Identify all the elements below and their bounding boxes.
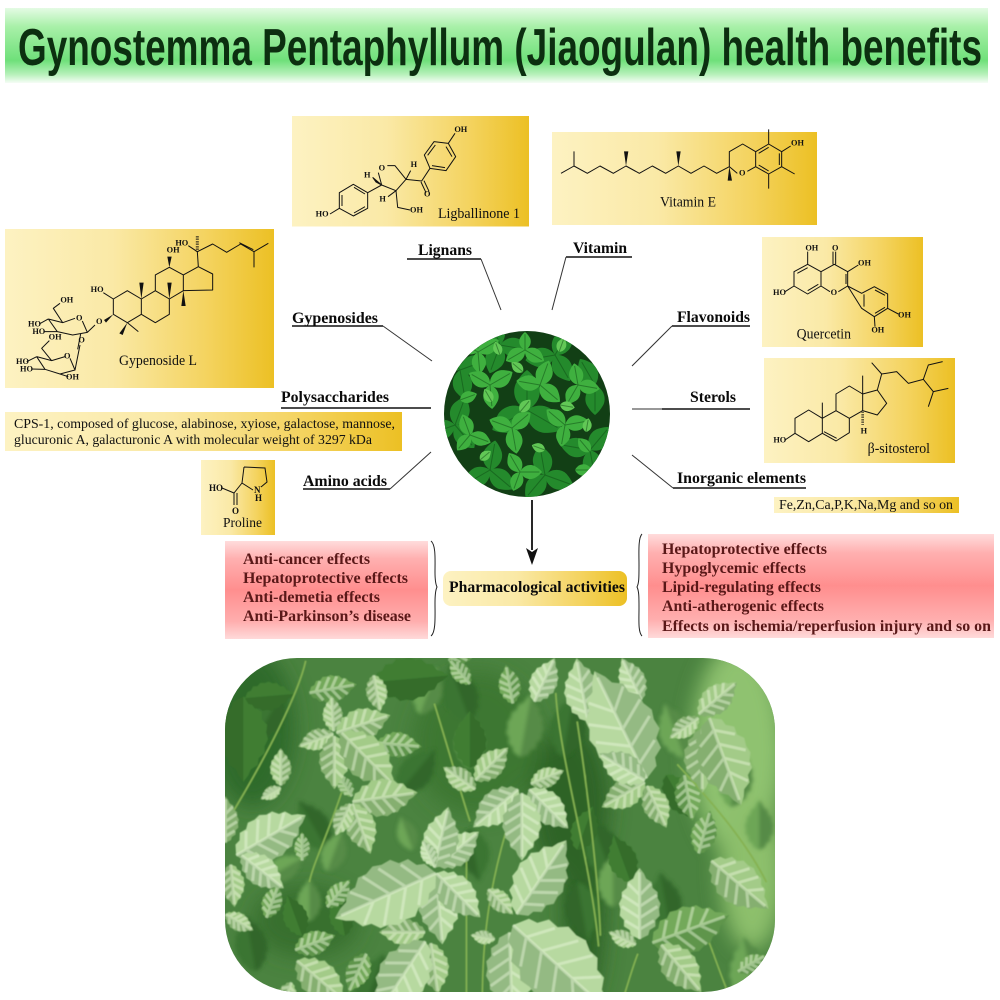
connector: Lignans: Lignans (418, 242, 472, 259)
stems (227, 661, 766, 1000)
panel: Vitamin E structure (552, 129, 817, 225)
connector: Gypenosides (292, 310, 432, 361)
panel: Quercetin structure: HO (773, 288, 786, 297)
panel: Gypenoside L structure (5, 229, 274, 388)
panel: Gypenoside L structure: OH (66, 373, 79, 382)
panel: pharmacological activities: Pharmacological activities (449, 579, 625, 596)
panel: Ligballinone 1 structure: H (411, 160, 418, 169)
panel: Gypenoside L structure: HO (32, 327, 46, 336)
panel: right effects list (648, 534, 994, 638)
panel: Gypenoside L structure: HO (175, 239, 189, 248)
panel: polysaccharide description: CPS-1, composed of glucose, alabinose, xyiose, galactose, mannose, (14, 416, 395, 431)
right brace (637, 534, 642, 636)
connector: Sterols: Sterols (690, 389, 736, 406)
panel: Gypenoside L structure: OH (60, 295, 74, 304)
panel: Proline structure: Proline (223, 516, 262, 531)
panel: Quercetin structure: O (831, 288, 838, 297)
panel: right effects list: Hypoglycemic effects (662, 560, 806, 577)
connector: Polysaccharides: Polysaccharides (281, 389, 389, 406)
blurred colour wash (225, 658, 775, 988)
light front leaves (224, 652, 678, 1000)
panel: Gypenoside L structure: HO (16, 357, 29, 366)
panel: Gypenoside L structure: O (64, 351, 71, 360)
panel: beta-sitosterol structure (764, 358, 955, 463)
panel: Ligballinone 1 structure: H (379, 195, 386, 204)
panel: Ligballinone 1 structure: H (364, 170, 371, 179)
panel: Gypenoside L structure: O (78, 335, 85, 344)
panel: Ligballinone 1 structure: HO (316, 210, 329, 219)
panel: Ligballinone 1 structure: OH (454, 125, 468, 134)
dark and mid foliage (242, 658, 688, 936)
panel: Gypenoside L structure: O (96, 317, 103, 326)
panel: polysaccharide description (5, 412, 402, 451)
central leaf photo (444, 331, 610, 497)
panel: Gypenoside L structure: O (76, 314, 83, 323)
panel: Ligballinone 1 structure: O (424, 190, 431, 199)
panel: Vitamin E structure: OH (791, 138, 804, 147)
connector: Amino acids: Amino acids (303, 473, 387, 490)
panel: Quercetin structure: OH (805, 244, 819, 253)
panel: Ligballinone 1 structure (292, 116, 529, 226)
panel: Quercetin structure: OH (871, 325, 885, 334)
panel: Quercetin structure: O (832, 244, 839, 253)
panel: pharmacological activities (443, 571, 627, 606)
panel: beta-sitosterol structure: β-sitosterol (868, 441, 930, 457)
arrow to pharmacological activities (526, 500, 538, 565)
panel: Proline structure (201, 460, 275, 535)
panel: Gypenoside L structure: HO (28, 320, 41, 329)
connector: Flavonoids: Flavonoids (677, 309, 750, 326)
connector: Sterols (632, 389, 750, 409)
panel: Proline structure: N (254, 485, 261, 495)
panel: Gypenoside L structure: OH (49, 333, 62, 342)
panel: right effects list: Effects on ischemia/reperfusion injury and so on (662, 618, 991, 635)
panel: Proline structure: HO (209, 483, 223, 493)
panel: polysaccharide description: glucuronic A, galacturonic A with molecular weight of 3297 kDa (14, 432, 372, 447)
panel: right effects list: Lipid-regulating effects (662, 579, 821, 596)
panel: Vitamin E structure: Vitamin E (660, 195, 716, 211)
panel: left effects list: Anti-demetia effects (243, 589, 380, 606)
panel: right effects list: Anti-atherogenic effects (662, 598, 824, 615)
connector: Gypenosides: Gypenosides (292, 310, 378, 327)
panel: beta-sitosterol structure: H (861, 427, 868, 436)
pale leaves (212, 671, 783, 1000)
connector: Vitamin (552, 240, 632, 310)
panel: beta-sitosterol structure: HO (773, 436, 787, 445)
connector: Lignans (407, 242, 501, 310)
panel: left effects list (225, 541, 428, 639)
connector: Flavonoids (632, 309, 750, 366)
connector: Amino acids (303, 452, 431, 490)
panel: left effects list: Anti-Parkinson’s disease (243, 608, 411, 625)
panel: Quercetin structure: OH (858, 259, 871, 268)
left brace (431, 541, 437, 636)
bottom photo of jiaogulan leaves (225, 658, 775, 992)
panel: Ligballinone 1 structure: OH (410, 206, 423, 215)
panel: Ligballinone 1 structure: O (379, 164, 386, 173)
connector: Inorganic elements (632, 455, 806, 488)
panel: Gypenoside L structure: Gypenoside L (119, 353, 197, 369)
panel: inorganic elements: Fe,Zn,Ca,P,K,Na,Mg and so on (779, 497, 953, 512)
panel: left effects list: Anti-cancer effects (243, 551, 370, 568)
panel: Proline structure: O (232, 506, 239, 516)
panel: Vitamin E structure: O (739, 168, 746, 177)
panel: right effects list: Hepatoprotective effects (662, 541, 827, 558)
panel: Quercetin structure: Quercetin (797, 327, 852, 343)
panel: Gypenoside L structure: HO (20, 364, 33, 373)
panel: Quercetin structure (762, 237, 923, 347)
connector: Vitamin: Vitamin (573, 240, 627, 257)
panel: Proline structure: H (255, 493, 262, 503)
connector: Inorganic elements: Inorganic elements (677, 470, 806, 487)
panel: Quercetin structure: OH (898, 310, 911, 319)
panel: Gypenoside L structure: HO (91, 285, 104, 294)
background foliage (229, 658, 776, 1000)
panel: left effects list: Hepatoprotective effects (243, 570, 408, 587)
panel: Gypenoside L structure: OH (167, 246, 180, 255)
panel: Ligballinone 1 structure: Ligballinone 1 (438, 206, 520, 222)
